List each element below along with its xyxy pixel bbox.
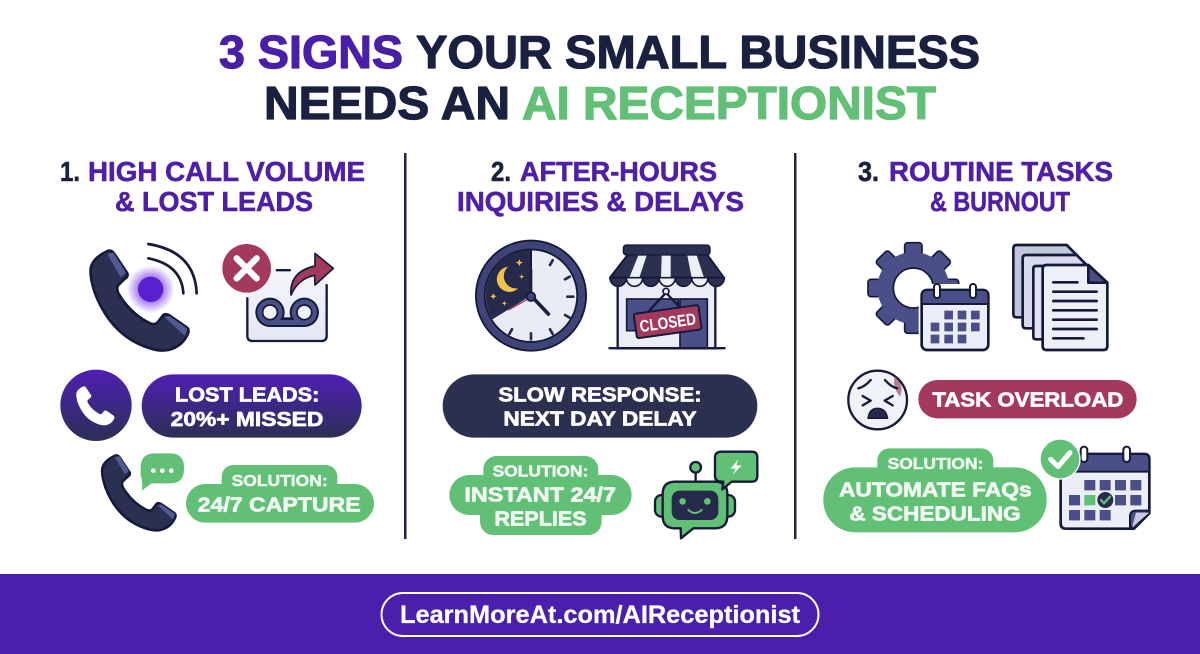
title: AI RECEPTIONIST — [522, 77, 936, 129]
solution: automate FAQs and scheduling: AUTOMATE FAQs — [839, 479, 1032, 502]
panel 1 artwork — [60, 244, 374, 530]
solution: instant replies — [449, 456, 632, 535]
footer band — [0, 574, 1200, 654]
solution: automate FAQs and scheduling — [823, 448, 1047, 532]
icon: gear and calendar — [868, 243, 991, 353]
icon: phone with chat bubble — [102, 453, 184, 530]
solution: instant replies: SOLUTION: — [493, 464, 588, 481]
divider 1 — [404, 153, 406, 539]
callout: slow response: SLOW RESPONSE: — [498, 385, 702, 407]
solution: 24/7 capture: SOLUTION: — [232, 473, 328, 490]
icon: phone badge — [60, 370, 132, 441]
icon: document stack — [1013, 245, 1107, 350]
heading 1: & LOST LEADS — [115, 186, 313, 217]
solution: 24/7 capture — [186, 465, 374, 523]
callout: slow response: NEXT DAY DELAY — [503, 409, 697, 431]
heading 2: AFTER-HOURS — [520, 156, 717, 187]
panel 3 artwork — [823, 243, 1149, 532]
icon: voicemail forwarded — [222, 244, 333, 342]
icon: robot with lightning bubble — [655, 452, 757, 538]
solution: instant replies: REPLIES — [494, 508, 587, 531]
heading 1: 1. — [60, 156, 80, 187]
heading 2 — [457, 156, 744, 217]
heading 3: & BURNOUT — [930, 186, 1070, 217]
title: 3 SIGNS — [219, 26, 403, 78]
title: YOUR SMALL BUSINESS — [416, 26, 980, 78]
footer link pill: LearnMoreAt.com/AIReceptionist — [400, 601, 801, 629]
callout: lost leads: LOST LEADS: — [175, 385, 319, 407]
footer link pill — [382, 593, 818, 636]
callout: task overload — [918, 380, 1137, 418]
icon: closed storefront — [608, 245, 726, 349]
title — [219, 26, 980, 129]
divider 2 — [794, 153, 796, 539]
solution: 24/7 capture: 24/7 CAPTURE — [198, 494, 361, 517]
icon: calendar with check — [1039, 438, 1149, 529]
solution: instant replies: INSTANT 24/7 — [464, 484, 616, 507]
heading 3: 3. — [858, 156, 879, 187]
callout: task overload: TASK OVERLOAD — [932, 389, 1123, 412]
icon: closed storefront: CLOSED — [638, 309, 697, 336]
heading 1 — [60, 156, 365, 217]
icon: night and day clock — [480, 245, 582, 346]
heading 3 — [858, 156, 1113, 217]
heading 2: INQUIRIES & DELAYS — [457, 186, 744, 217]
panel: routine tasks — [823, 156, 1149, 532]
panel: after-hours inquiries — [443, 156, 757, 538]
icon: stressed face — [848, 371, 907, 429]
callout: slow response — [443, 374, 757, 438]
heading 3: ROUTINE TASKS — [889, 156, 1113, 187]
icon: ringing phone — [91, 244, 197, 351]
heading 1: HIGH CALL VOLUME — [88, 156, 365, 187]
title: NEEDS AN — [264, 77, 510, 129]
solution: automate FAQs and scheduling: & SCHEDULING — [849, 503, 1021, 526]
heading 2: 2. — [491, 156, 511, 187]
solution: automate FAQs and scheduling: SOLUTION: — [888, 456, 983, 473]
panel 2 artwork — [443, 245, 757, 538]
callout: lost leads — [142, 374, 362, 438]
callout: lost leads: 20%+ MISSED — [171, 409, 323, 431]
panel: high call volume — [60, 156, 374, 530]
